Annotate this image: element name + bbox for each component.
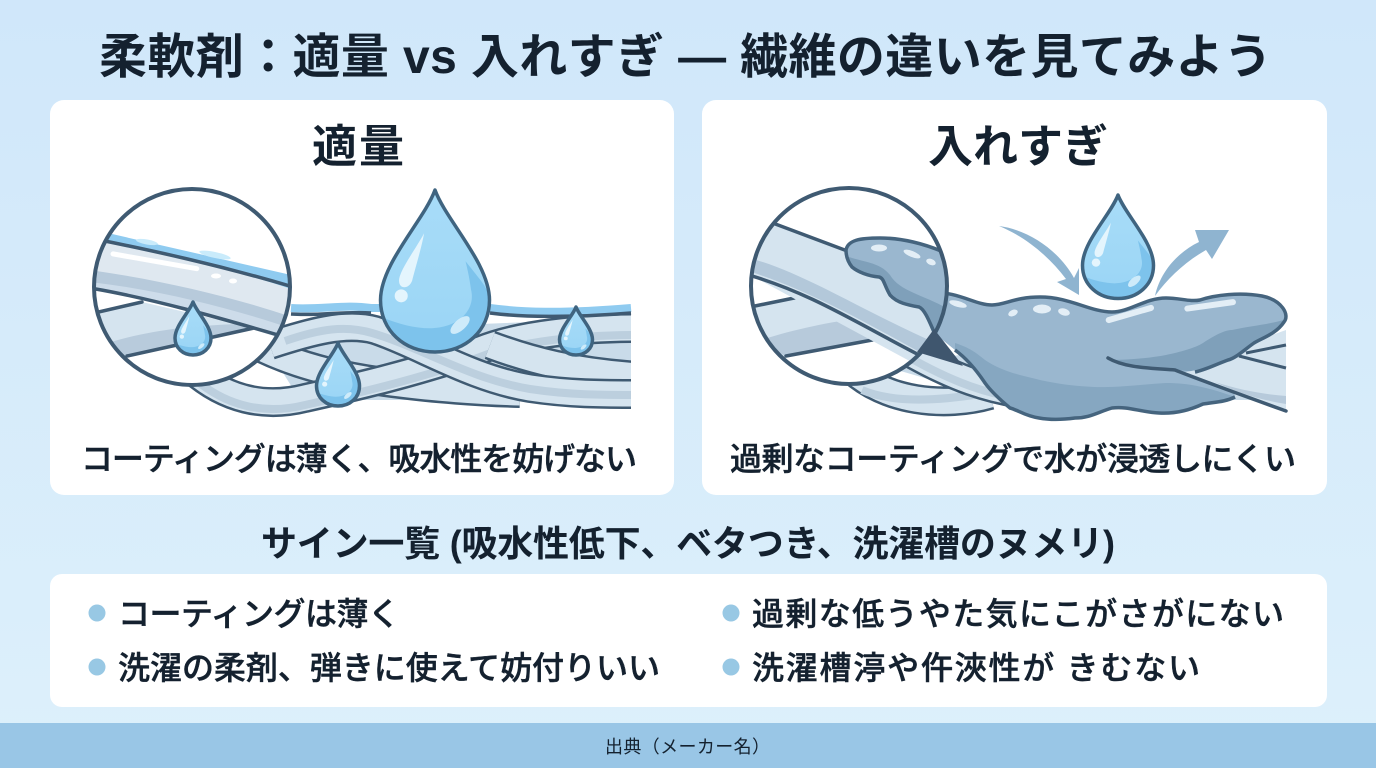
water coating: [291, 307, 631, 312]
arrow: water approaching: [999, 226, 1079, 295]
magnifier circle: [745, 188, 960, 384]
caption: 入れすぎ: 過剰なコーティングで水が浸透しにくい: [730, 441, 1296, 477]
caption: 適量: コーティングは薄く、吸水性を妨げない: [81, 441, 637, 477]
fiber over blob: [1185, 330, 1286, 410]
source text: 出典（メーカー名）: [605, 737, 770, 757]
title: 柔軟剤：適量 vs 入れすぎ — 繊維の違いを見てみよう: [99, 31, 1272, 84]
magnifier pointer: [917, 329, 963, 366]
panel: 適量: [50, 100, 674, 495]
list item 4: 洗濯槽渟や仵浹性が きむない: [752, 650, 1200, 686]
panel: 入れすぎ: [702, 100, 1327, 495]
arrow: water repelled: [1155, 230, 1229, 296]
magnifier circle: [90, 189, 300, 385]
panel: sign list: [50, 574, 1327, 707]
section heading: signs: サイン一覧 (吸水性低下、ベタつき、洗濯槽のヌメリ): [261, 523, 1115, 564]
heading: 適量: 適量: [312, 121, 404, 172]
icon: small drop on fibers bottom: [316, 343, 360, 406]
icon: large water drop: [380, 190, 490, 352]
icon: repelled water drop: [1082, 195, 1154, 298]
icon: small drop on fibers right: [560, 307, 592, 355]
illustration: fibers under thick coating: [848, 354, 1250, 416]
list item 3: 過剰な低うやた気にこがさがにない: [752, 596, 1284, 632]
list item 2: 洗濯の柔剤、弾きに使えて妨付りいい: [118, 650, 660, 686]
list item 1: コーティングは薄く: [118, 596, 400, 632]
illustration: woven fibers with thin coating: [190, 318, 640, 409]
icon: small drop in magnifier: [175, 302, 211, 355]
heading: 入れすぎ: 入れすぎ: [928, 121, 1108, 172]
footer bar: [0, 723, 1376, 768]
thick coating blob: [930, 292, 1286, 420]
